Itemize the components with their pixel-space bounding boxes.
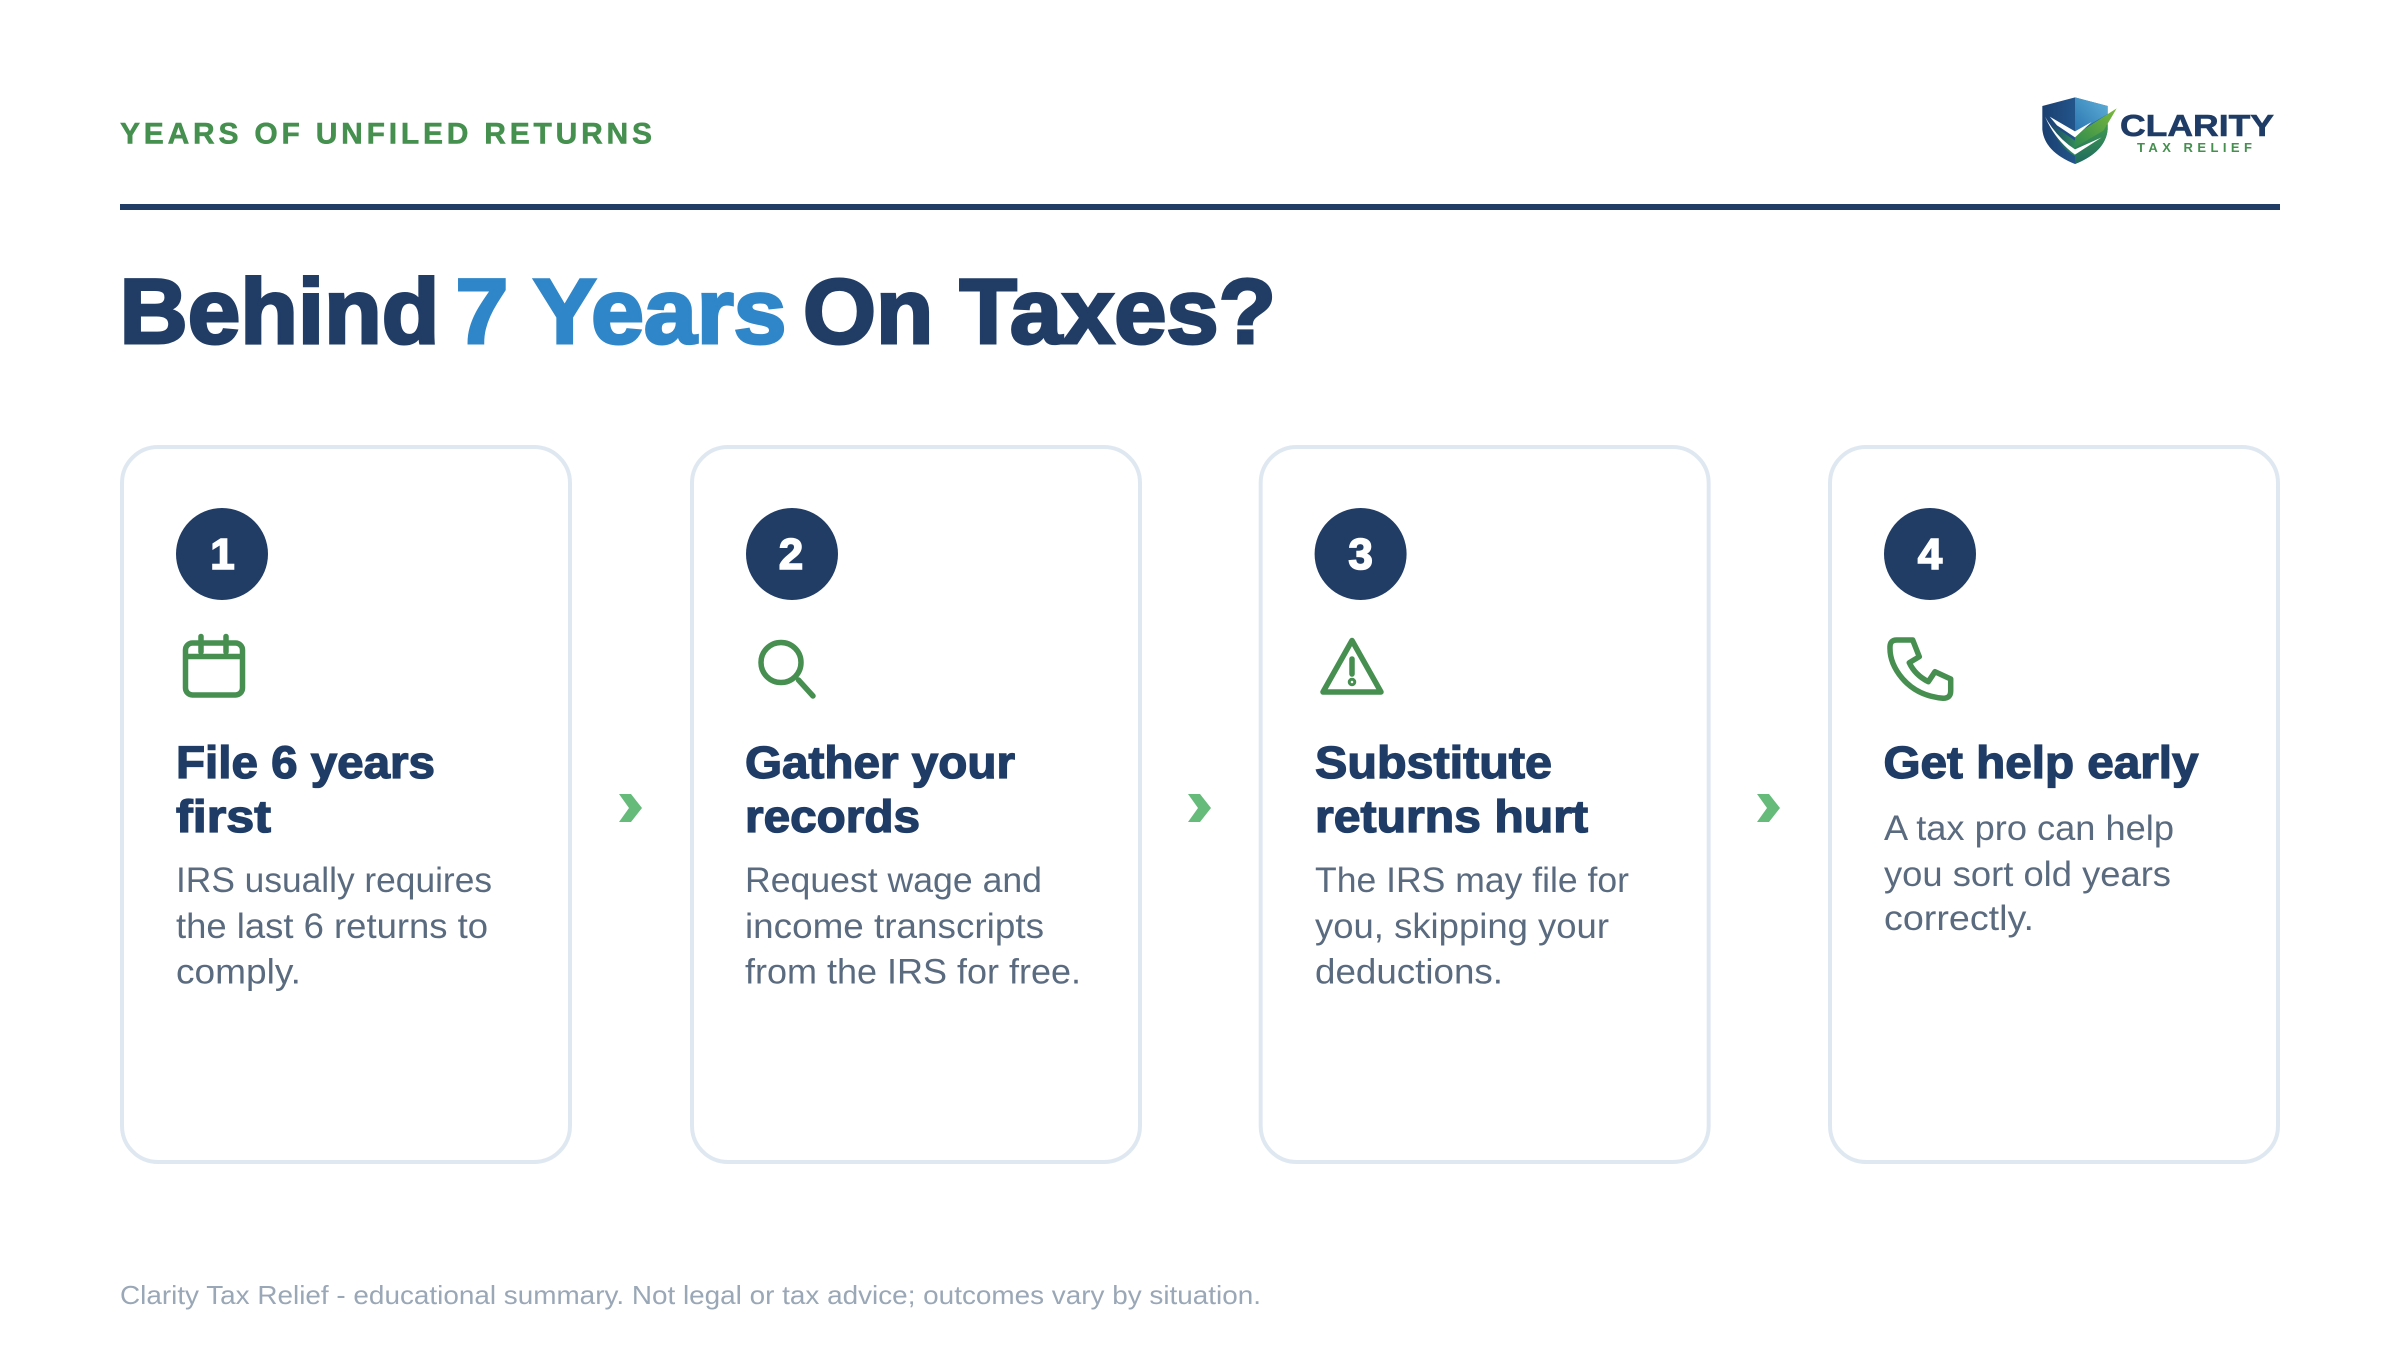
eyebrow heading: YEARS OF UNFILED RETURNS bbox=[120, 118, 652, 150]
icon: phone bbox=[1890, 640, 1951, 698]
number badge 3: 3 bbox=[1348, 530, 1373, 579]
number badge 1 bbox=[176, 508, 268, 600]
card 1 outline bbox=[122, 447, 570, 1162]
card 1 body bbox=[176, 861, 492, 992]
card 2 body bbox=[745, 861, 1081, 992]
card 3 heading: returns hurt bbox=[1315, 791, 1588, 842]
number badge 4 bbox=[1884, 508, 1976, 600]
title: On Taxes? bbox=[803, 261, 1276, 363]
card 4 body: you sort old years bbox=[1884, 855, 2171, 894]
icon: magnifier bbox=[761, 642, 813, 696]
number badge 2 bbox=[746, 508, 838, 600]
arrow 2 bbox=[1188, 794, 1211, 822]
title: Behind bbox=[120, 261, 439, 363]
number badge 4: 4 bbox=[1918, 530, 1943, 579]
card 4 heading: Get help early bbox=[1884, 737, 2198, 788]
logo: Clarity Tax Relief bbox=[2042, 97, 2274, 164]
card 1 body: the last 6 returns to bbox=[176, 907, 488, 946]
panel: step 1 bbox=[122, 447, 570, 1162]
card 2 body: income transcripts bbox=[745, 907, 1044, 946]
arrow 3 bbox=[1757, 794, 1780, 822]
card 2 heading bbox=[745, 737, 1015, 842]
card 1 body: IRS usually requires bbox=[176, 861, 492, 900]
number badge 2: 2 bbox=[779, 530, 803, 579]
card 3 heading: Substitute bbox=[1315, 737, 1552, 788]
arrow 1 bbox=[619, 794, 642, 822]
card 4 body: A tax pro can help bbox=[1884, 809, 2174, 848]
footer disclaimer: Clarity Tax Relief - educational summary. Not legal or tax advice; outcomes vary by situation. bbox=[120, 1280, 1261, 1310]
logo wordmark: CLARITY bbox=[2120, 108, 2274, 143]
card 4 outline bbox=[1830, 447, 2278, 1162]
icon: calendar bbox=[186, 636, 242, 695]
logo tagline: TAX RELIEF bbox=[2137, 140, 2252, 155]
card 4 body bbox=[1884, 809, 2174, 938]
icon: warning triangle bbox=[1323, 640, 1381, 692]
icon: shield with check bbox=[2042, 97, 2117, 164]
title bbox=[120, 261, 1276, 363]
card 1 heading bbox=[176, 737, 435, 842]
title: 7 Years bbox=[456, 261, 786, 363]
panel: step 3 bbox=[1261, 447, 1709, 1162]
card 3 body: deductions. bbox=[1315, 952, 1503, 992]
card 2 body: Request wage and bbox=[745, 861, 1042, 900]
card 2 body: from the IRS for free. bbox=[745, 952, 1081, 992]
card 3 heading bbox=[1315, 737, 1588, 842]
number badge 3 bbox=[1315, 508, 1407, 600]
card 1 heading: first bbox=[176, 791, 271, 842]
card 3 body: The IRS may file for bbox=[1315, 861, 1629, 900]
card 2 heading: records bbox=[745, 791, 920, 842]
card 1 heading: File 6 years bbox=[176, 737, 435, 788]
card 3 body: you, skipping your bbox=[1315, 907, 1609, 946]
card 2 heading: Gather your bbox=[745, 737, 1015, 788]
panel: step 2 bbox=[692, 447, 1140, 1162]
card 1 body: comply. bbox=[176, 952, 301, 992]
number badge 1: 1 bbox=[210, 530, 235, 579]
card 4 body: correctly. bbox=[1884, 899, 2034, 938]
card 3 body bbox=[1315, 861, 1629, 992]
card 2 outline bbox=[692, 447, 1140, 1162]
panel: step 4 bbox=[1830, 447, 2278, 1162]
header rule bbox=[120, 204, 2280, 210]
card 3 outline bbox=[1261, 447, 1709, 1162]
